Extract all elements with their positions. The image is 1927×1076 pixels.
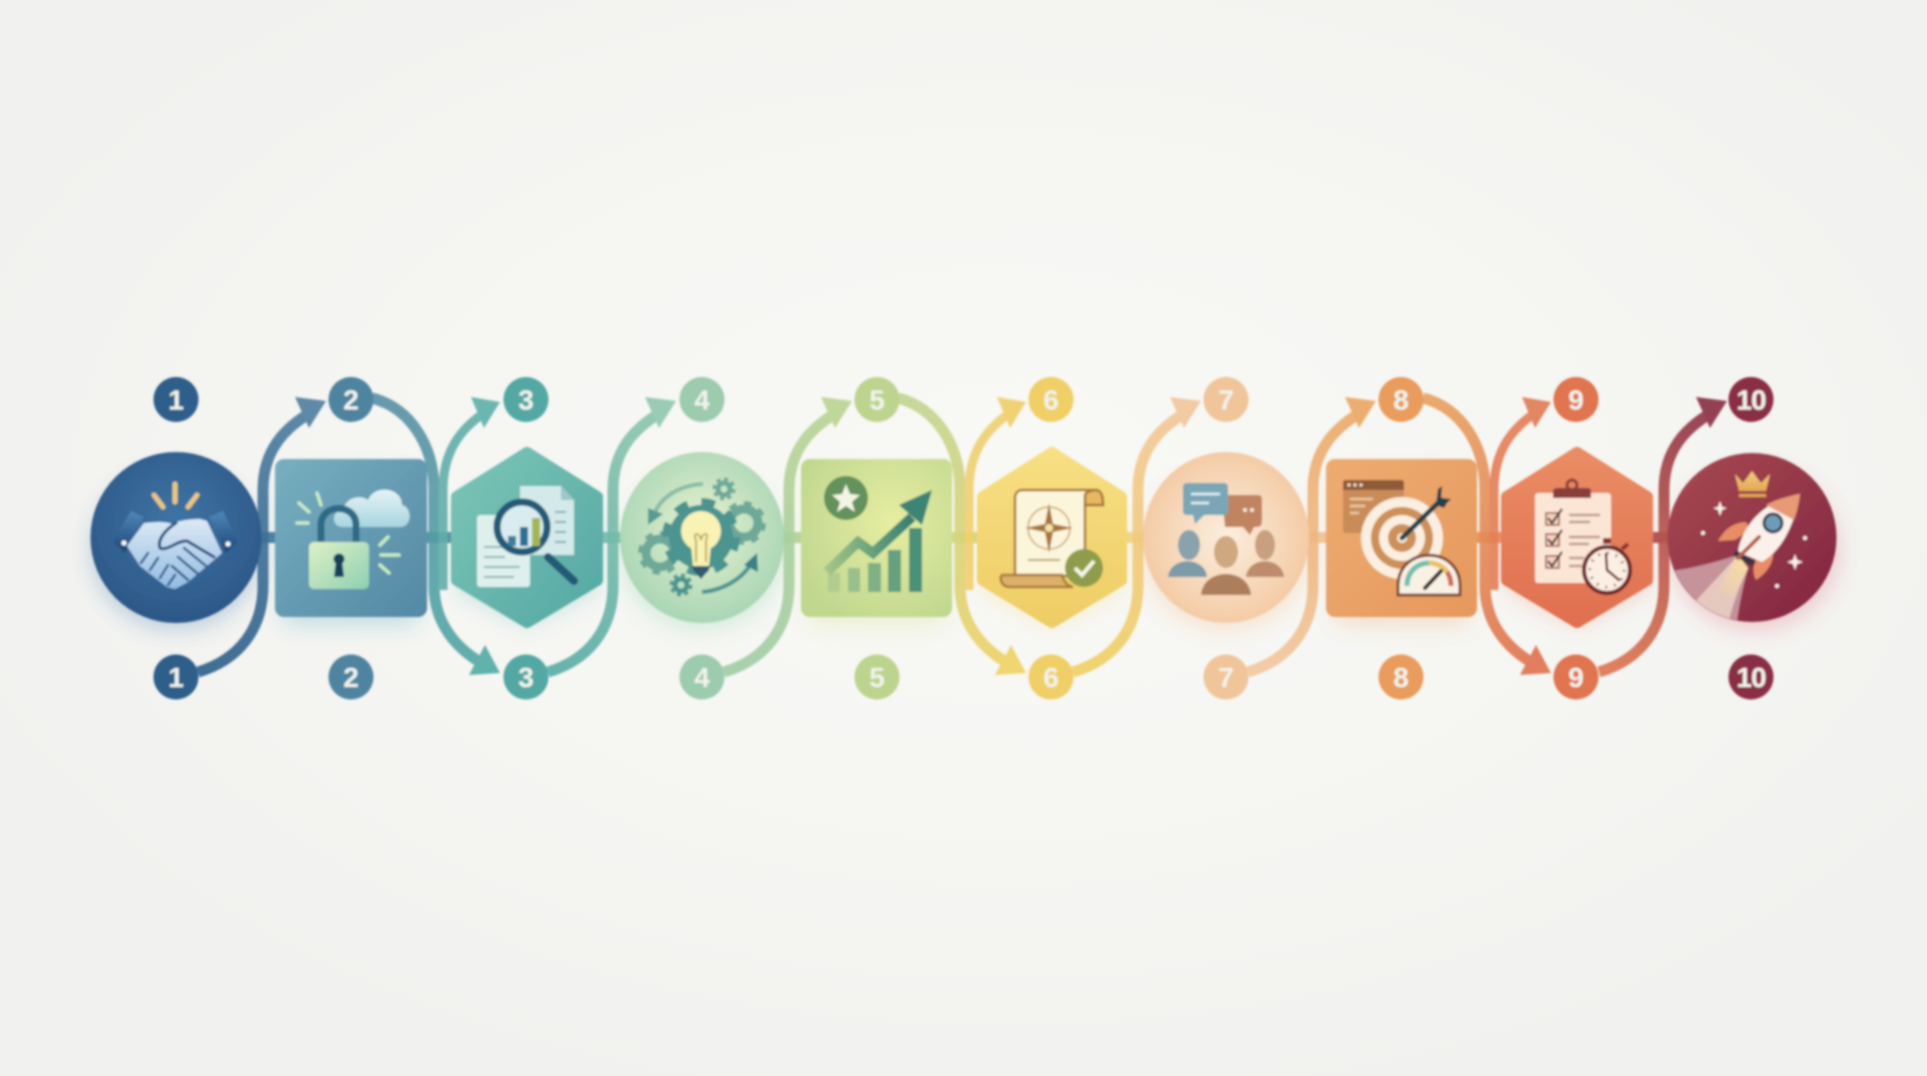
arrow: gap to top 9: [1494, 397, 1551, 590]
badge: bottom 1: [154, 654, 198, 700]
icon: target: [1361, 497, 1443, 579]
badge: top 6: [1028, 377, 1074, 422]
badge: top 1: 1: [168, 384, 184, 416]
badge: bottom 6: 6: [1043, 662, 1059, 693]
arrow: top 2 to bottom 3: [372, 398, 500, 675]
badge: bottom 6: [1028, 654, 1074, 700]
badge: top 7: 7: [1218, 384, 1234, 416]
badge: bottom 8: 8: [1393, 662, 1409, 693]
icon: crown: [1735, 471, 1770, 497]
arrow: bottom 6 to top 7: [1073, 397, 1201, 672]
arrow: bottom 3 to top 4: [548, 397, 676, 672]
badge: top 10: 10: [1736, 384, 1766, 416]
icon: dart: [1402, 486, 1451, 538]
badge: top 8: 8: [1393, 384, 1409, 416]
badge: top 2: [328, 377, 374, 422]
step 2: lock and cloud square: [275, 459, 427, 625]
process flow diagram: [90, 377, 1839, 700]
badge: bottom 5: [854, 654, 900, 700]
icon: gears with lightbulb: [641, 479, 763, 595]
icon: cloud: [334, 490, 410, 527]
step 10: rocket circle: [1660, 453, 1839, 630]
step 9: checklist hexagon: [1507, 453, 1647, 625]
icon: gauge: [1398, 555, 1460, 595]
badge: bottom 10: 10: [1736, 662, 1766, 693]
icon: documents and magnifier: [477, 486, 574, 587]
icon: speech bubbles: [1183, 483, 1262, 535]
icon: three people: [1168, 530, 1284, 595]
icon: scroll with compass: [1001, 490, 1103, 587]
top number badges: [154, 377, 1774, 422]
badge: top 9: 9: [1568, 384, 1584, 416]
badge: top 1: [154, 377, 198, 422]
badge: bottom 7: [1204, 654, 1248, 700]
badge: top 3: 3: [518, 384, 534, 416]
chart: rising bars and arrow: [827, 490, 932, 592]
arrow: gap to top 3: [443, 397, 500, 590]
icon: stopwatch: [1584, 538, 1630, 593]
badge: bottom 3: [504, 654, 548, 700]
arrow: bottom 7 to top 8: [1248, 397, 1376, 672]
badge: top 3: [504, 377, 548, 422]
icon: clipboard: [1535, 480, 1611, 583]
arrow: bottom 4 to top 5: [724, 397, 852, 672]
icon: handshake: [113, 484, 238, 589]
arrow: top 8 to bottom 9: [1423, 398, 1551, 675]
arrow: gap to top 6: [969, 397, 1026, 590]
badge: bottom 2: [328, 654, 374, 700]
step 5: growth chart square: [801, 459, 952, 625]
badge: top 6: 6: [1043, 384, 1059, 416]
badge: top 2: 2: [343, 384, 359, 416]
curved arrows: [198, 397, 1727, 675]
icon: padlock: [309, 508, 369, 589]
icon: rocket: [1718, 494, 1800, 580]
badge: top 8: [1378, 377, 1424, 422]
badge: top 9: [1554, 377, 1598, 422]
badge: bottom 5: 5: [869, 662, 885, 693]
arrow: top 5 to bottom 6: [898, 398, 1026, 675]
badge: top 10: [1728, 377, 1774, 422]
icon: stars: [1701, 501, 1807, 588]
step 8: target square: [1326, 459, 1477, 625]
badge: top 4: 4: [694, 384, 710, 416]
bottom number badges: [154, 654, 1774, 700]
badge: bottom 1: 1: [168, 662, 184, 693]
badge: bottom 10: [1728, 654, 1774, 700]
horizontal connector bars: [255, 532, 1672, 543]
badge: bottom 2: 2: [343, 662, 359, 693]
icon: star badge: [824, 476, 868, 520]
badge: bottom 7: 7: [1218, 662, 1234, 693]
badge: top 5: 5: [869, 384, 885, 416]
step 3: magnifier hexagon: [457, 453, 597, 625]
icon: sparkle rays: [297, 493, 399, 573]
badge: bottom 9: 9: [1568, 662, 1584, 693]
badge: top 4: [680, 377, 724, 422]
badge: bottom 8: [1378, 654, 1424, 700]
step 1: handshake circle: [90, 452, 262, 630]
icon: browser window: [1343, 480, 1404, 533]
step 4: lightbulb gears circle: [620, 452, 784, 630]
badge: top 7: [1204, 377, 1248, 422]
badge: bottom 4: 4: [694, 662, 710, 693]
arrow: bottom 1 to top 2: [198, 397, 326, 672]
step 7: team discussion circle: [1143, 452, 1309, 630]
badge: top 5: [854, 377, 900, 422]
badge: bottom 9: [1554, 654, 1598, 700]
arrow: bottom 9 to top 10: [1599, 397, 1727, 672]
icon: rocket exhaust: [1674, 554, 1750, 622]
badge: bottom 4: [680, 654, 724, 700]
badge: bottom 3: 3: [518, 662, 534, 693]
step 6: scroll hexagon: [982, 453, 1122, 625]
